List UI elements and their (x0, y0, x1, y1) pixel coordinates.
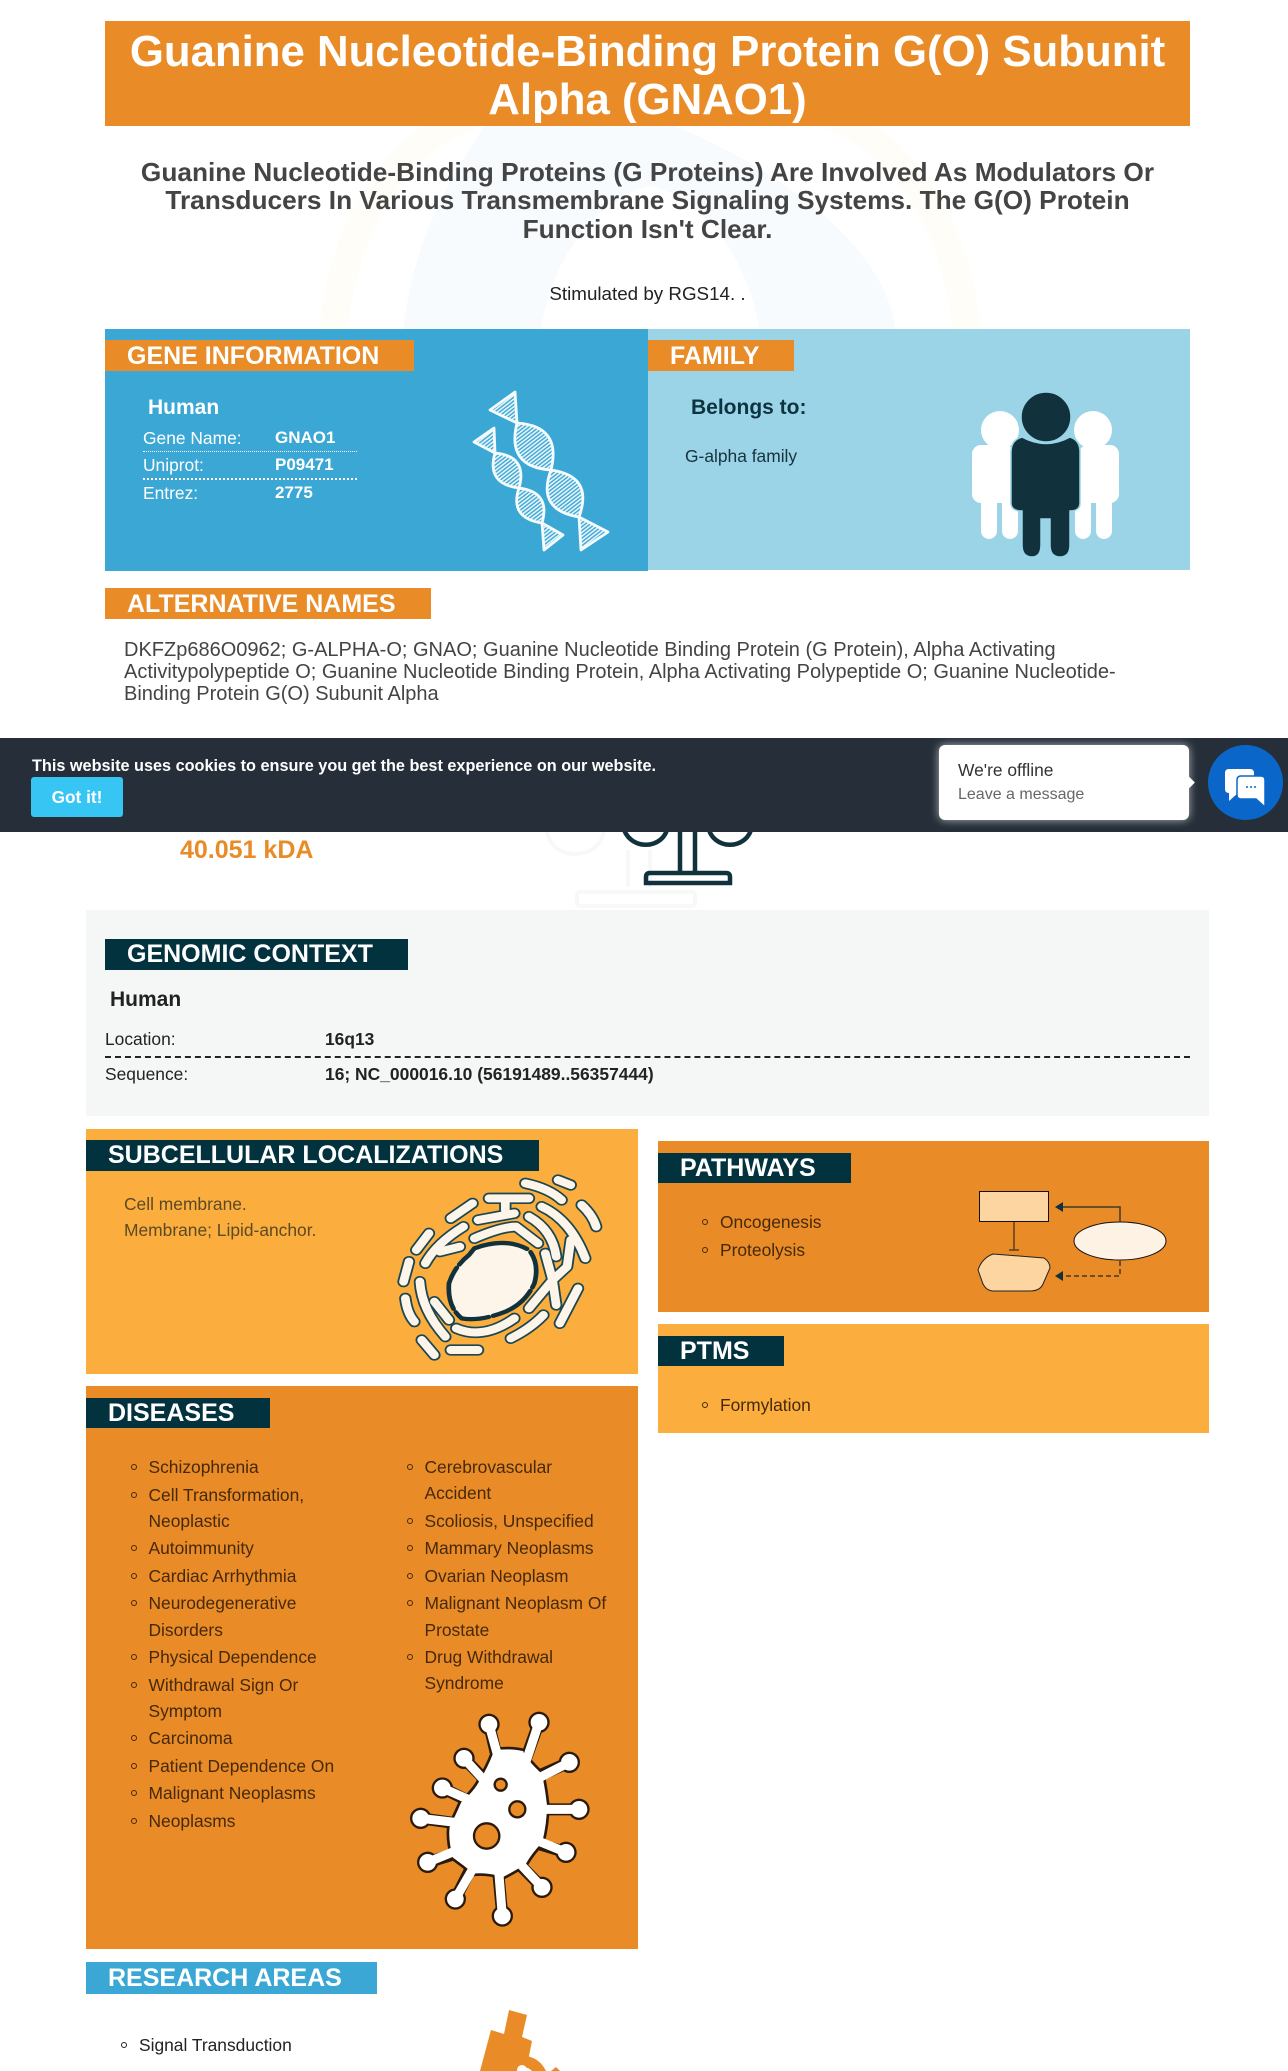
disease list: left column: Schizophrenia (148, 1457, 259, 1477)
icon: virus (410, 1712, 590, 1927)
icon: organelle (397, 1174, 602, 1361)
heading: pathways (658, 1153, 851, 1183)
heading: ptms (658, 1336, 784, 1366)
disease list: left column: Symptom (148, 1701, 222, 1721)
species label: Human (148, 396, 219, 419)
gene name row: Gene Name: (143, 428, 242, 448)
heading: genomic context: GENOMIC CONTEXT (127, 940, 373, 968)
cookie banner (0, 738, 1288, 832)
uniprot row: P09471 (275, 455, 334, 474)
disease list: right column: Syndrome (424, 1673, 504, 1693)
location row: 16q13 (325, 1029, 374, 1049)
disease list: right column: Cerebrovascular (424, 1457, 552, 1477)
species label: Human (110, 988, 181, 1011)
subtitle: Transducers In Various Transmembrane Signaling Systems. The G(O) Protein (165, 185, 1130, 215)
alternative names text (124, 639, 1116, 705)
panel: ptms (658, 1324, 1209, 1433)
localization text (124, 1194, 316, 1240)
heading: family (648, 340, 794, 371)
button: got it (31, 777, 123, 817)
pathway: oncogenesis: Oncogenesis (720, 1212, 822, 1232)
localization text: Cell membrane. (124, 1194, 247, 1214)
panel: gene information (105, 329, 648, 571)
location row (105, 1029, 1190, 1058)
disease list: left column: Cardiac Arrhythmia (148, 1566, 296, 1586)
panel: genomic context (86, 910, 1209, 1116)
sequence row (105, 1064, 654, 1084)
disease list: left column: Cell Transformation, (148, 1485, 304, 1505)
disease list: left column: Disorders (148, 1620, 223, 1640)
disease list: left column: Withdrawal Sign Or (148, 1675, 298, 1695)
uniprot row: Uniprot: (143, 455, 204, 475)
subtitle: Function Isn't Clear. (523, 214, 772, 244)
icon: balance (622, 832, 753, 886)
ptm: formylation: Formylation (720, 1395, 811, 1415)
subtitle: Guanine Nucleotide-Binding Proteins (G Proteins) Are Involved As Modulators Or (141, 157, 1154, 187)
sequence row: Sequence: (105, 1064, 188, 1084)
panel: subcellular localizations (86, 1129, 638, 1374)
disease list: left column: Neurodegenerative (148, 1593, 296, 1613)
research item: Signal Transduction (139, 2035, 292, 2055)
alternative names text: DKFZp686O0962; G-ALPHA-O; GNAO; Guanine Nucleotide Binding Protein (G Protein), Alpha Activating (124, 639, 1056, 661)
button: chat (1208, 745, 1283, 820)
uniprot row (143, 455, 357, 480)
icon: dna (472, 390, 610, 552)
disease list: left column (131, 1457, 334, 1831)
disease list: right column: Prostate (424, 1620, 489, 1640)
disease list: left column: Malignant Neoplasms (148, 1783, 316, 1803)
family name: G-alpha family (685, 446, 797, 466)
disease list: right column: Scoliosis, Unspecified (424, 1511, 594, 1531)
icon: pathway diagram (978, 1191, 1166, 1292)
heading: ptms: PTMS (680, 1337, 749, 1365)
subtitle (141, 157, 1154, 244)
icon: microscope (480, 2010, 560, 2071)
disease list: left column: Neoplastic (148, 1511, 230, 1531)
location row: Location: (105, 1029, 176, 1049)
button: got it: Got it! (52, 787, 102, 807)
heading: research areas: RESEARCH AREAS (108, 1964, 342, 1992)
background watermark (300, 126, 1000, 336)
alternative names text: Binding Protein G(O) Subunit Alpha (124, 683, 439, 705)
molecular mass value: 40.051 kDA (180, 836, 313, 864)
disease list: left column: Autoimmunity (148, 1538, 254, 1558)
chat prompt: Leave a message (958, 786, 1084, 803)
heading: family: FAMILY (670, 342, 759, 370)
disease list: left column: Patient Dependence On (148, 1756, 334, 1776)
pathway: proteolysis: Proteolysis (720, 1240, 805, 1260)
entrez row: Entrez: (143, 483, 198, 503)
disease list: left column: Physical Dependence (148, 1647, 317, 1667)
title: Guanine Nucleotide-Binding Protein G(O) Subunit (130, 27, 1165, 76)
belongs to label: Belongs to: (691, 396, 806, 419)
title (105, 21, 1190, 126)
disease list: right column: Mammary Neoplasms (424, 1538, 594, 1558)
disease list: right column: Ovarian Neoplasm (424, 1566, 569, 1586)
panel: pathways (658, 1141, 1209, 1312)
disease list: right column: Accident (424, 1483, 491, 1503)
heading: pathways: PATHWAYS (680, 1154, 816, 1182)
localization text: Membrane; Lipid-anchor. (124, 1220, 316, 1240)
disease list: left column: Carcinoma (148, 1728, 233, 1748)
entrez row (143, 483, 313, 503)
disease list: left column: Neoplasms (148, 1811, 236, 1831)
title: Alpha (GNAO1) (488, 75, 807, 124)
panel: family (648, 329, 1190, 570)
disease list: right column: Drug Withdrawal (424, 1647, 553, 1667)
heading: diseases (86, 1398, 270, 1428)
heading: gene information: GENE INFORMATION (127, 342, 379, 370)
disease list: right column: Malignant Neoplasm Of (424, 1593, 606, 1613)
alternative names text: Activitypolypeptide O; Guanine Nucleotide Binding Protein, Alpha Activating Polypeptide O; Guanine Nucleotide- (124, 661, 1116, 683)
panel: diseases (86, 1386, 638, 1949)
chat bubble (939, 745, 1189, 820)
disease list: right column (407, 1457, 606, 1693)
gene name row (143, 428, 357, 452)
heading: diseases: DISEASES (108, 1399, 234, 1427)
icon: people (972, 392, 1119, 556)
cookie message: This website uses cookies to ensure you get the best experience on our website. (32, 757, 656, 775)
heading: alternative names: ALTERNATIVE NAMES (127, 590, 396, 618)
sequence row: 16; NC_000016.10 (56191489..56357444) (325, 1064, 654, 1084)
chat status: We're offline (958, 760, 1053, 780)
gene name row: GNAO1 (275, 428, 335, 447)
function note: Stimulated by RGS14. . (549, 283, 746, 304)
entrez row: 2775 (275, 483, 313, 502)
chat pointer (1182, 776, 1195, 789)
heading: subcellular localizations: SUBCELLULAR LOCALIZATIONS (108, 1141, 503, 1169)
